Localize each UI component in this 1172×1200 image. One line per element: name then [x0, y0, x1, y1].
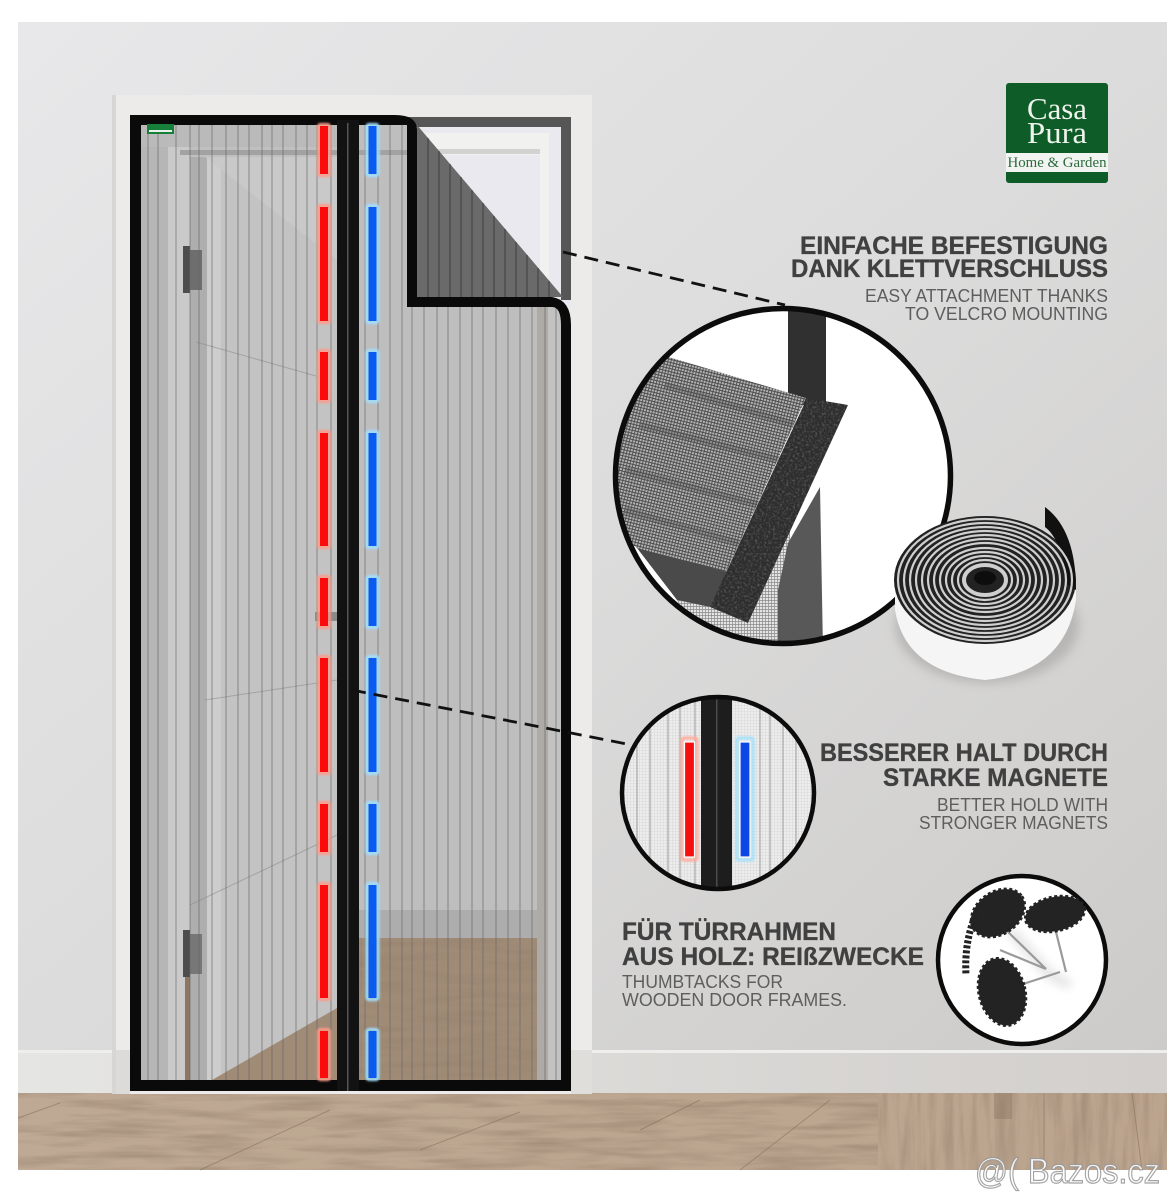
logo: Casa Pura: Home & Garden [1008, 155, 1107, 171]
heading: Velcro attachment [791, 232, 1108, 324]
heading: stronger magnets: STRONGER MAGNETS [919, 812, 1108, 833]
lower pale mesh [677, 530, 790, 650]
black outer frame with folded corner [130, 115, 571, 1091]
heading: thumbtacks: AUS HOLZ: REIßZWECKE [622, 943, 924, 971]
circle detail: thumbtacks [938, 876, 1106, 1044]
heading: stronger magnets [820, 739, 1108, 833]
magnetic mesh door [130, 115, 571, 1091]
blue magnets [367, 124, 378, 1080]
folded corner: doorway seen behind [407, 117, 571, 310]
mesh panel [141, 125, 562, 1080]
heading: Velcro attachment: EASY ATTACHMENT THANKS [865, 285, 1108, 306]
heading: thumbtacks [622, 917, 924, 1010]
heading: stronger magnets: BETTER HOLD WITH [937, 794, 1108, 815]
door frame [112, 95, 592, 1094]
fabric hems [778, 487, 823, 650]
Velcro strip [710, 398, 848, 623]
roll tail [1045, 507, 1076, 590]
Velcro roll [894, 507, 1079, 683]
circle detail: Velcro on mesh [600, 300, 951, 650]
baseboard [18, 1050, 1167, 1093]
logo: Casa Pura: Casa [1027, 91, 1087, 126]
heading: Velcro attachment: DANK KLETTVERSCHLUSS [791, 255, 1108, 283]
mini green logo [147, 124, 174, 134]
logo: Casa Pura [1006, 83, 1108, 183]
wooden floor [18, 1093, 1167, 1170]
heading: thumbtacks: THUMBTACKS FOR [622, 971, 783, 992]
heading: Velcro attachment: TO VELCRO MOUNTING [905, 303, 1108, 324]
pins [1000, 928, 1066, 985]
heading: Velcro attachment: EINFACHE BEFESTIGUNG [800, 232, 1108, 260]
heading: stronger magnets: BESSERER HALT DURCH [820, 739, 1108, 767]
door seen through the mesh [141, 147, 337, 1080]
heading: thumbtacks: WOODEN DOOR FRAMES. [622, 989, 847, 1010]
logo: Casa Pura: Pura [1027, 115, 1087, 150]
mounting strap [788, 311, 826, 405]
folded mesh triangle [417, 125, 563, 297]
door handle [315, 612, 337, 621]
hinges [183, 246, 202, 977]
central magnetic strip [337, 120, 359, 1091]
dashed leader line to magnet detail [352, 690, 632, 745]
pin shadow [1010, 930, 1070, 985]
circle detail: magnets [620, 695, 816, 891]
room seen through the mesh [359, 307, 548, 1080]
dashed leader line to Velcro detail [563, 252, 785, 305]
heading: stronger magnets: STARKE MAGNETE [883, 764, 1108, 792]
mesh corner [618, 357, 806, 606]
heading: thumbtacks: FÜR TÜRRAHMEN [622, 917, 836, 946]
tack heads [962, 879, 1088, 1031]
mesh vertical stripes [148, 125, 556, 1080]
red magnets [318, 124, 330, 1080]
watermark: @( Bazos.cz [975, 1152, 1160, 1191]
